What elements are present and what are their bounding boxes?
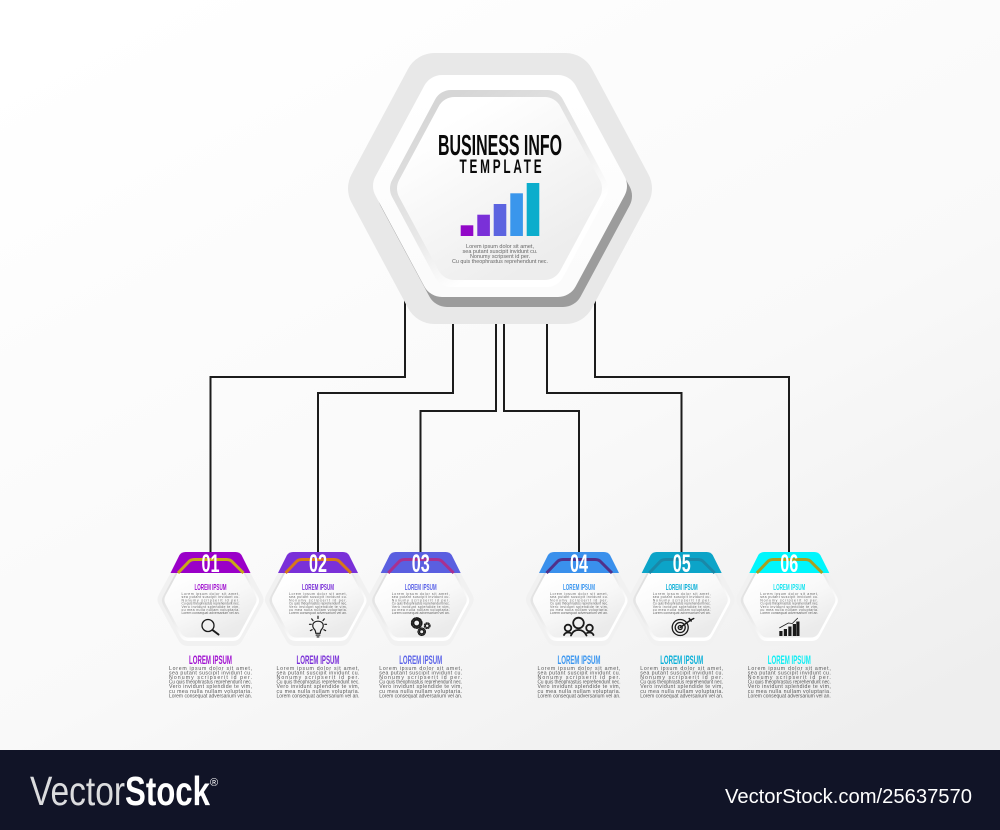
inner text: cu mea nulla nullam voluptaria. [760, 608, 818, 612]
inner text: Lorem ipsum dolor sit amet, [289, 592, 347, 596]
body text: Vero invidunt splendide te vim, [169, 684, 252, 690]
number: 04 [570, 550, 588, 578]
body text: Lorem ipsum dolor sit amet, [748, 666, 831, 672]
icon: gears [412, 618, 430, 635]
body text: cu mea nulla nullam voluptaria. [276, 689, 360, 695]
body text: Lorem ipsum dolor sit amet, [276, 666, 360, 672]
inner text: Cu quis theophrastus reprehendunt nec. [182, 602, 240, 606]
description text: sea putant suscipit invidunt cu. [462, 249, 538, 255]
panel: item 04 [536, 550, 622, 699]
inner text: Nonumy scripserit id per. [760, 598, 818, 602]
inner text: Cu quis theophrastus reprehendunt nec. [653, 602, 711, 606]
body text: sea putant suscipit invidunt cu. [640, 670, 723, 676]
inner text: sea putant suscipit invidunt cu. [550, 595, 608, 599]
inner text: sea putant suscipit invidunt cu. [182, 595, 240, 599]
inner text: Cu quis theophrastus reprehendunt nec. [550, 602, 608, 606]
subtitle: TEMPLATE [460, 157, 544, 178]
title: BUSINESS INFO [438, 130, 562, 162]
panel: central hexagon [378, 83, 622, 294]
tab [539, 552, 619, 573]
inner text: Vero invidunt splendide te vim, [392, 605, 450, 609]
heading: LOREM IPSUM [189, 655, 232, 667]
tab [749, 552, 829, 573]
footer bar [0, 750, 1000, 830]
body text: Nonumy scripserit id per. [640, 675, 723, 681]
body text: sea putant suscipit invidunt cu. [748, 670, 831, 676]
body text: Nonumy scripserit id per. [748, 675, 831, 681]
body text: sea putant suscipit invidunt cu. [169, 670, 252, 676]
body text [538, 666, 620, 699]
body text: Nonumy scripserit id per. [379, 675, 462, 681]
body text: Cu quis theophrastus reprehendunt nec. [379, 680, 462, 686]
body text: Vero invidunt splendide te vim, [748, 684, 831, 690]
inner text: Cu quis theophrastus reprehendunt nec. [392, 602, 450, 606]
panel: item 01 [168, 550, 254, 699]
body text: Lorem ipsum dolor sit amet, [538, 666, 620, 672]
logo: ® [210, 777, 218, 789]
tab [278, 552, 358, 573]
inner text: Vero invidunt splendide te vim, [760, 605, 818, 609]
icon: light bulb [309, 616, 327, 637]
body text [379, 666, 462, 699]
panel: item 02 [275, 550, 361, 699]
inner heading: LOREM IPSUM [563, 582, 595, 592]
body text: Nonumy scripserit id per. [538, 675, 620, 681]
inner text: Nonumy scripserit id per. [550, 598, 608, 602]
inner text: Lorem ipsum dolor sit amet, [392, 592, 450, 596]
inner text: Nonumy scripserit id per. [182, 598, 240, 602]
inner text: Cu quis theophrastus reprehendunt nec. [289, 602, 347, 606]
body text: Vero invidunt splendide te vim, [379, 684, 462, 690]
body text [276, 666, 360, 699]
tab [170, 552, 250, 573]
logo: Stock [125, 768, 210, 814]
body text: Cu quis theophrastus reprehendunt nec. [748, 680, 831, 686]
number: 06 [780, 550, 798, 578]
body text: Lorem consequat adversarium vel an. [748, 693, 831, 699]
icon: target [672, 618, 694, 636]
body text: cu mea nulla nullam voluptaria. [748, 689, 831, 695]
description text [452, 244, 548, 265]
body text: Lorem consequat adversarium vel an. [276, 693, 360, 699]
body text [640, 666, 723, 699]
number: 02 [309, 550, 327, 578]
number: 03 [412, 550, 430, 578]
body text: Lorem ipsum dolor sit amet, [640, 666, 723, 672]
body text: Vero invidunt splendide te vim, [640, 684, 723, 690]
body text: Lorem consequat adversarium vel an. [169, 693, 252, 699]
inner text: cu mea nulla nullam voluptaria. [289, 608, 347, 612]
body text: Lorem consequat adversarium vel an. [379, 693, 462, 699]
body text: Lorem consequat adversarium vel an. [538, 693, 620, 699]
inner heading: LOREM IPSUM [666, 582, 698, 592]
inner text: cu mea nulla nullam voluptaria. [550, 608, 608, 612]
heading: LOREM IPSUM [399, 655, 442, 667]
inner text: cu mea nulla nullam voluptaria. [392, 608, 450, 612]
body text: Cu quis theophrastus reprehendunt nec. [276, 680, 360, 686]
inner text [760, 592, 818, 615]
inner text: Lorem ipsum dolor sit amet, [653, 592, 711, 596]
body text: cu mea nulla nullam voluptaria. [640, 689, 723, 695]
body text: sea putant suscipit invidunt cu. [379, 670, 462, 676]
panel: item 06 [746, 550, 832, 699]
inner text: Lorem ipsum dolor sit amet, [182, 592, 240, 596]
inner text: Lorem consequat adversarium vel an. [182, 611, 240, 615]
body text: Cu quis theophrastus reprehendunt nec. [169, 680, 252, 686]
inner text: Lorem consequat adversarium vel an. [550, 611, 608, 615]
bar chart [461, 183, 539, 236]
inner text: Nonumy scripserit id per. [653, 598, 711, 602]
inner text [289, 592, 347, 615]
body text: sea putant suscipit invidunt cu. [276, 670, 360, 676]
inner text [392, 592, 450, 615]
inner text: Vero invidunt splendide te vim, [653, 605, 711, 609]
icon: magnifier [202, 620, 218, 634]
inner text [550, 592, 608, 615]
heading: LOREM IPSUM [296, 655, 340, 667]
number: 05 [673, 550, 691, 578]
inner heading: LOREM IPSUM [405, 582, 437, 592]
inner text: Lorem consequat adversarium vel an. [289, 611, 347, 615]
description text: Cu quis theophrastus reprehendunt nec. [452, 259, 548, 265]
inner heading: LOREM IPSUM [302, 582, 334, 592]
logo [30, 768, 218, 814]
body text: Vero invidunt splendide te vim, [276, 684, 360, 690]
inner text: Vero invidunt splendide te vim, [182, 605, 240, 609]
body text: cu mea nulla nullam voluptaria. [538, 689, 620, 695]
inner text: Lorem consequat adversarium vel an. [392, 611, 450, 615]
inner text: Lorem consequat adversarium vel an. [653, 611, 711, 615]
logo: Vector [30, 768, 125, 814]
inner text: Nonumy scripserit id per. [392, 598, 450, 602]
icon: growth chart [779, 618, 800, 636]
body text: Nonumy scripserit id per. [169, 675, 252, 681]
inner text: cu mea nulla nullam voluptaria. [653, 608, 711, 612]
inner text: sea putant suscipit invidunt cu. [653, 595, 711, 599]
body text: cu mea nulla nullam voluptaria. [379, 689, 462, 695]
heading: LOREM IPSUM [768, 655, 811, 667]
body text: Lorem consequat adversarium vel an. [640, 693, 723, 699]
body text: Lorem ipsum dolor sit amet, [169, 666, 252, 672]
inner heading: LOREM IPSUM [194, 582, 226, 592]
heading: LOREM IPSUM [660, 655, 703, 667]
body text: Vero invidunt splendide te vim, [538, 684, 620, 690]
body text: Cu quis theophrastus reprehendunt nec. [640, 680, 723, 686]
inner text: Lorem ipsum dolor sit amet, [550, 592, 608, 596]
panel: item 05 [639, 550, 725, 699]
tab [642, 552, 722, 573]
body text: Cu quis theophrastus reprehendunt nec. [538, 680, 620, 686]
inner text [182, 592, 240, 615]
description text: Nonumy scripsent id per. [470, 254, 530, 260]
body text: Lorem ipsum dolor sit amet, [379, 666, 462, 672]
inner heading: LOREM IPSUM [773, 582, 805, 592]
body text [748, 666, 831, 699]
inner text: Cu quis theophrastus reprehendunt nec. [760, 602, 818, 606]
inner text: sea putant suscipit invidunt cu. [289, 595, 347, 599]
icon: people [564, 618, 594, 636]
heading: LOREM IPSUM [558, 655, 601, 667]
description text: Lorem ipsum dolor sit amet, [466, 244, 534, 250]
url: VectorStock.com/25637570 [725, 786, 972, 808]
body text [169, 666, 252, 699]
inner text [653, 592, 711, 615]
body text: cu mea nulla nullam voluptaria. [169, 689, 252, 695]
number: 01 [202, 550, 220, 578]
inner text: Lorem consequat adversarium vel an. [760, 611, 818, 615]
inner text: Vero invidunt splendide te vim, [289, 605, 347, 609]
tab [381, 552, 461, 573]
inner text: sea putant suscipit invidunt cu. [760, 595, 818, 599]
inner text: sea putant suscipit invidunt cu. [392, 595, 450, 599]
inner text: cu mea nulla nullam voluptaria. [182, 608, 240, 612]
connector lines [210, 290, 789, 553]
inner text: Nonumy scripserit id per. [289, 598, 347, 602]
inner text: Lorem ipsum dolor sit amet, [760, 592, 818, 596]
panel: item 03 [378, 550, 464, 699]
body text: Nonumy scripserit id per. [276, 675, 360, 681]
body text: sea putant suscipit invidunt cu. [538, 670, 620, 676]
inner text: Vero invidunt splendide te vim, [550, 605, 608, 609]
